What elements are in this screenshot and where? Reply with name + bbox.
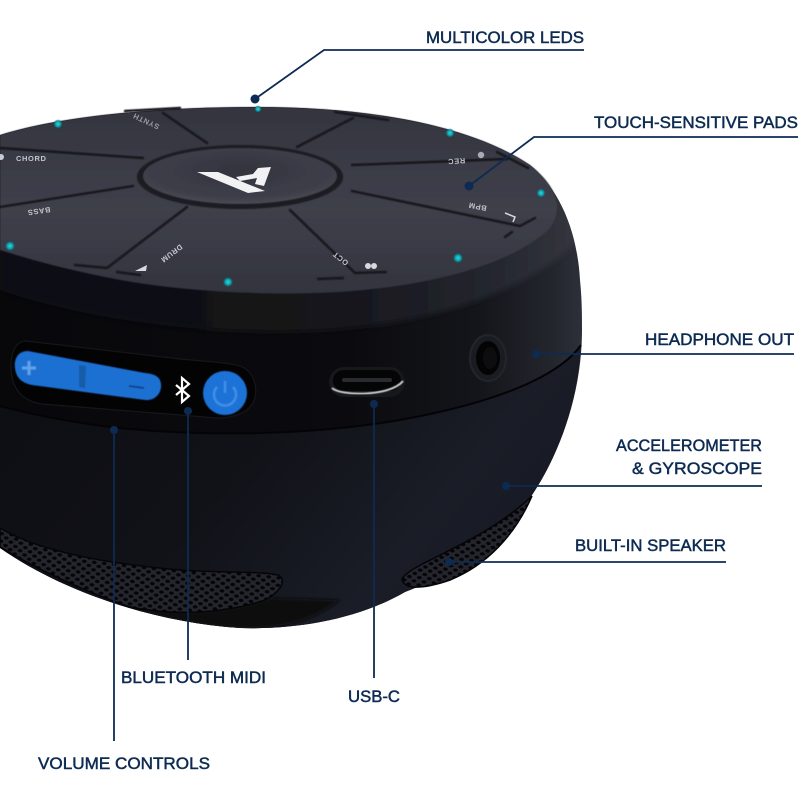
top rim [0,165,585,332]
upper body [0,107,582,628]
callout: headphone out: HEADPHONE OUT [645,330,794,349]
USB-C port [329,367,405,397]
pad labels [0,111,515,271]
callout: multicolor LEDs [250,28,584,104]
pad labels: BASS [27,205,51,217]
device: hardware controller [0,106,585,628]
callout: bluetooth MIDI: BLUETOOTH MIDI [121,668,266,687]
callout: USB-C: USB-C [348,687,400,706]
logo [197,167,271,193]
callout: volume controls: VOLUME CONTROLS [38,754,210,773]
pad labels: DRUM [159,242,184,265]
callout: USB-C [348,400,400,706]
callout: bluetooth MIDI [121,407,266,687]
seam [0,345,581,433]
callout: headphone out [532,330,794,358]
pad labels: CHORD [16,154,46,163]
pad labels: BPM [468,201,487,213]
callout: accelerometer and gyroscope: ACCELEROMETER [616,436,762,455]
headphone jack [470,335,506,381]
control panel [11,341,256,418]
icon: bluetooth [176,378,189,402]
callout: volume controls [38,426,210,773]
LED indicators [5,106,546,287]
callout: multicolor LEDs: MULTICOLOR LEDS [426,28,584,47]
callout: built-in speaker [445,536,726,566]
center dome with logo [137,145,343,209]
lower shell [0,345,581,628]
volume rocker [15,351,161,400]
right speaker grille [402,496,532,587]
left speaker grille [0,528,282,612]
callout: touch-sensitive pads [464,113,798,190]
pad labels: OCT [331,250,350,268]
pad labels: SYNTH [131,111,161,131]
pad labels: REC [447,156,465,166]
base shadow [120,598,340,628]
pad dividers [0,108,535,279]
callout: touch-sensitive pads: TOUCH-SENSITIVE PADS [594,113,798,132]
power button [203,371,247,415]
top surface [0,107,557,293]
callout: accelerometer and gyroscope [502,436,762,490]
callout: accelerometer and gyroscope: & GYROSCOPE [632,459,762,478]
callout: built-in speaker: BUILT-IN SPEAKER [575,536,726,555]
